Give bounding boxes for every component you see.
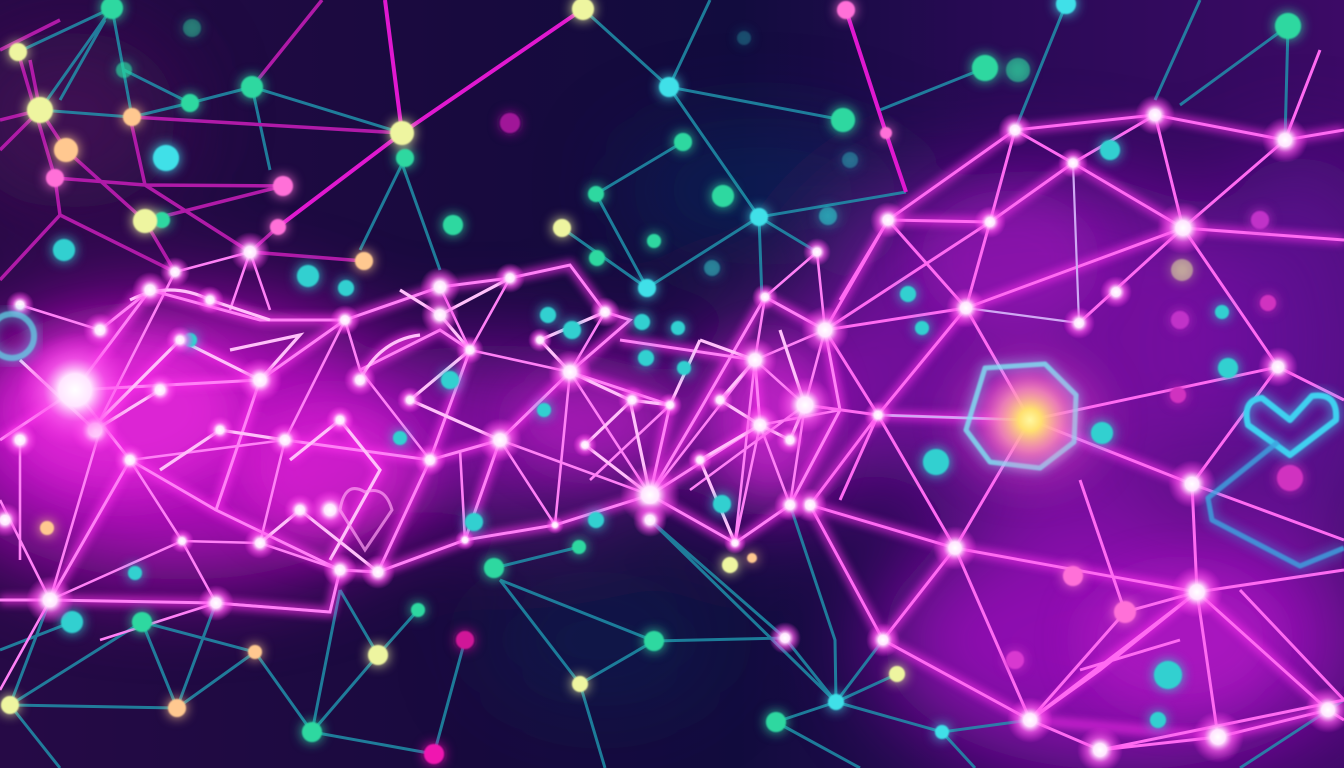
right magenta dome glow — [810, 115, 1344, 737]
peach nodes — [40, 108, 757, 717]
brighter glow hot spots — [0, 190, 1280, 710]
left magenta mesh glow — [0, 265, 840, 612]
icon: faint heart in mesh — [340, 489, 392, 550]
pink upper-left connecting lines — [0, 0, 906, 280]
icon: heart outline — [1247, 396, 1336, 455]
left magenta mesh lines — [0, 252, 840, 690]
right magenta dome lines — [805, 50, 1344, 750]
icon: rounded hexagon outline — [966, 364, 1076, 468]
icon: faint cyan ring at left edge — [0, 314, 34, 358]
bright core burst left — [17, 332, 133, 448]
icon: large faint hexagon — [1208, 442, 1344, 566]
cyan nodes — [153, 0, 1076, 739]
glowing sun node — [974, 364, 1086, 476]
